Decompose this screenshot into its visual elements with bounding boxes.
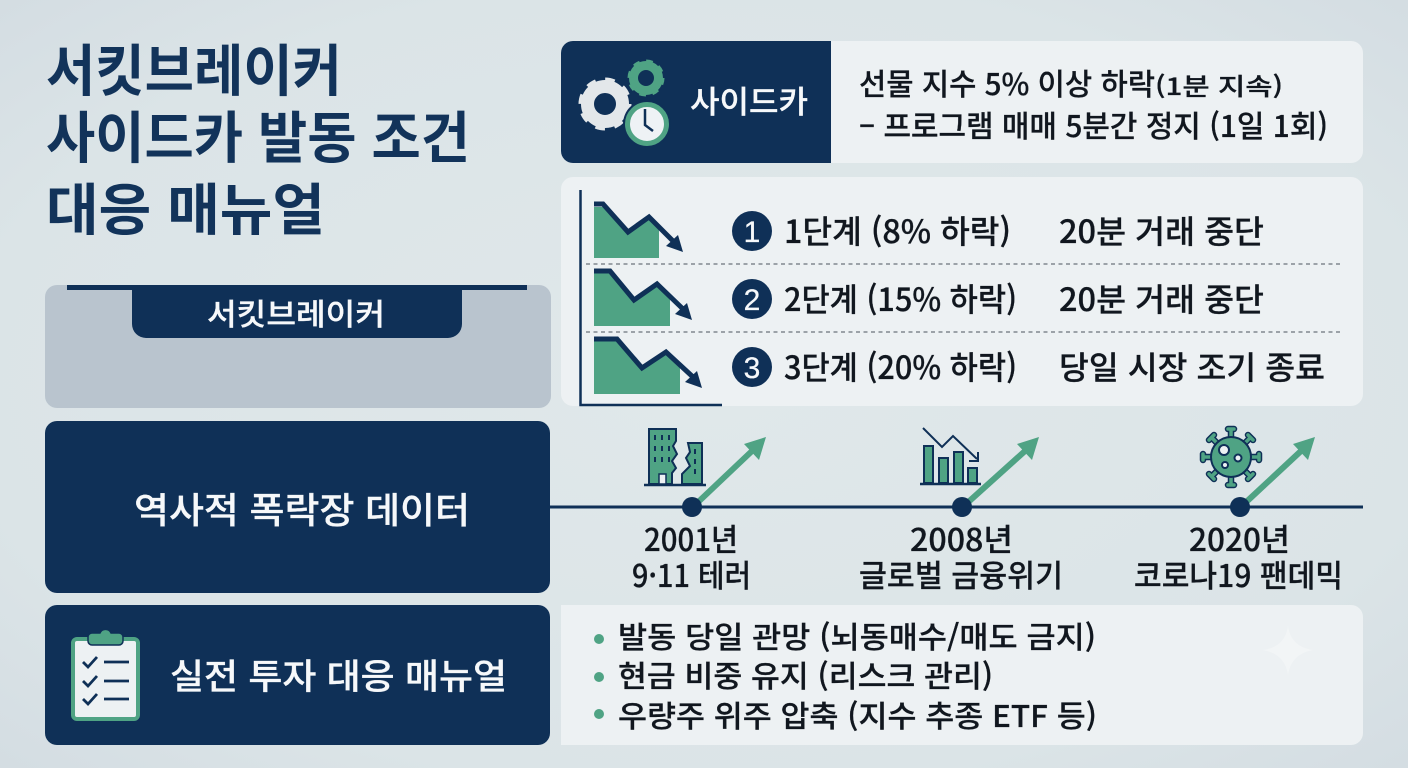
panel: circuit breaker label bbox=[45, 285, 551, 408]
stage 2 row: 2단계 (15% 하락) bbox=[784, 275, 1017, 321]
panel: historical crash heading: 역사적 폭락장 데이터 bbox=[134, 482, 470, 534]
stage 2 row: 20분 거래 중단 bbox=[1059, 275, 1264, 321]
panel: sidecar: 사이드카 bbox=[690, 77, 808, 122]
title: 대응 매뉴얼 bbox=[46, 166, 325, 247]
chart: stage 1 bbox=[594, 204, 683, 258]
bullet list: 발동 당일 관망 (뇌동매수/매도 금지) bbox=[618, 613, 1096, 657]
icon: virus bbox=[1203, 429, 1259, 485]
stage 3 row bbox=[732, 343, 1325, 389]
chart: stage 2 bbox=[594, 271, 692, 326]
title bbox=[46, 27, 470, 247]
panel: investor response manual heading: 실전 투자 대응 매뉴얼 bbox=[170, 649, 507, 700]
text block: sidecar condition: – 프로그램 매매 5분간 정지 (1일 1회) bbox=[859, 102, 1328, 146]
stage 1 row: 1 bbox=[744, 216, 760, 249]
panel: response checklist bbox=[561, 605, 1363, 745]
panel: circuit breaker stages bbox=[561, 177, 1363, 406]
bullet list: 현금 비중 유지 (리스크 관리) bbox=[618, 652, 993, 696]
icon: gears and clock bbox=[582, 62, 671, 148]
event: 2020: 2020년 bbox=[1189, 515, 1290, 560]
event: 2020 bbox=[1134, 429, 1343, 596]
panel: circuit breaker label: 서킷브레이커 bbox=[207, 290, 385, 334]
stage 2 row: 2 bbox=[744, 284, 760, 317]
text block: sidecar condition bbox=[859, 60, 1328, 146]
icon: sparkle bbox=[1263, 626, 1313, 675]
arrow: rebound bbox=[695, 437, 766, 505]
stage 1 row: 1단계 (8% 하락) bbox=[784, 207, 1011, 253]
event: 2001: 9·11 테러 bbox=[632, 551, 751, 596]
stage 1 row bbox=[732, 207, 1264, 253]
stage 1 row: 20분 거래 중단 bbox=[1059, 207, 1264, 253]
stage 3 row: 3단계 (20% 하락) bbox=[784, 343, 1017, 389]
chart: stage 3 bbox=[594, 339, 702, 394]
icon: clipboard checklist bbox=[73, 629, 138, 719]
stage 3 row: 3 bbox=[744, 352, 760, 385]
title: 사이드카 발동 조건 bbox=[46, 94, 470, 175]
event: 2020: 코로나19 팬데믹 bbox=[1134, 551, 1343, 596]
timeline bbox=[550, 428, 1363, 596]
icon: falling bar chart bbox=[920, 428, 981, 484]
panel: investor response manual heading bbox=[45, 605, 550, 745]
text block: sidecar condition: 선물 지수 5% 이상 하락 bbox=[859, 60, 1155, 104]
arrow: rebound bbox=[965, 437, 1039, 505]
event: 2001 bbox=[632, 429, 766, 596]
event: 2008 bbox=[859, 428, 1063, 596]
arrow: rebound bbox=[1243, 437, 1315, 505]
event: 2001: 2001년 bbox=[644, 515, 738, 560]
event: 2008: 2008년 bbox=[910, 515, 1013, 560]
event: 2008: 글로벌 금융위기 bbox=[859, 551, 1063, 596]
panel: historical crash heading bbox=[45, 421, 550, 593]
bullet list: 우량주 위주 압축 (지수 추종 ETF 등) bbox=[618, 692, 1097, 736]
title: 서킷브레이커 bbox=[46, 27, 342, 108]
text block: sidecar condition: (1분 지속) bbox=[1155, 67, 1283, 102]
stage 2 row bbox=[732, 275, 1264, 321]
stage 3 row: 당일 시장 조기 종료 bbox=[1059, 343, 1325, 389]
icon: damaged buildings bbox=[644, 429, 706, 485]
panel: sidecar bbox=[561, 41, 1363, 163]
bullet list bbox=[594, 613, 1097, 736]
